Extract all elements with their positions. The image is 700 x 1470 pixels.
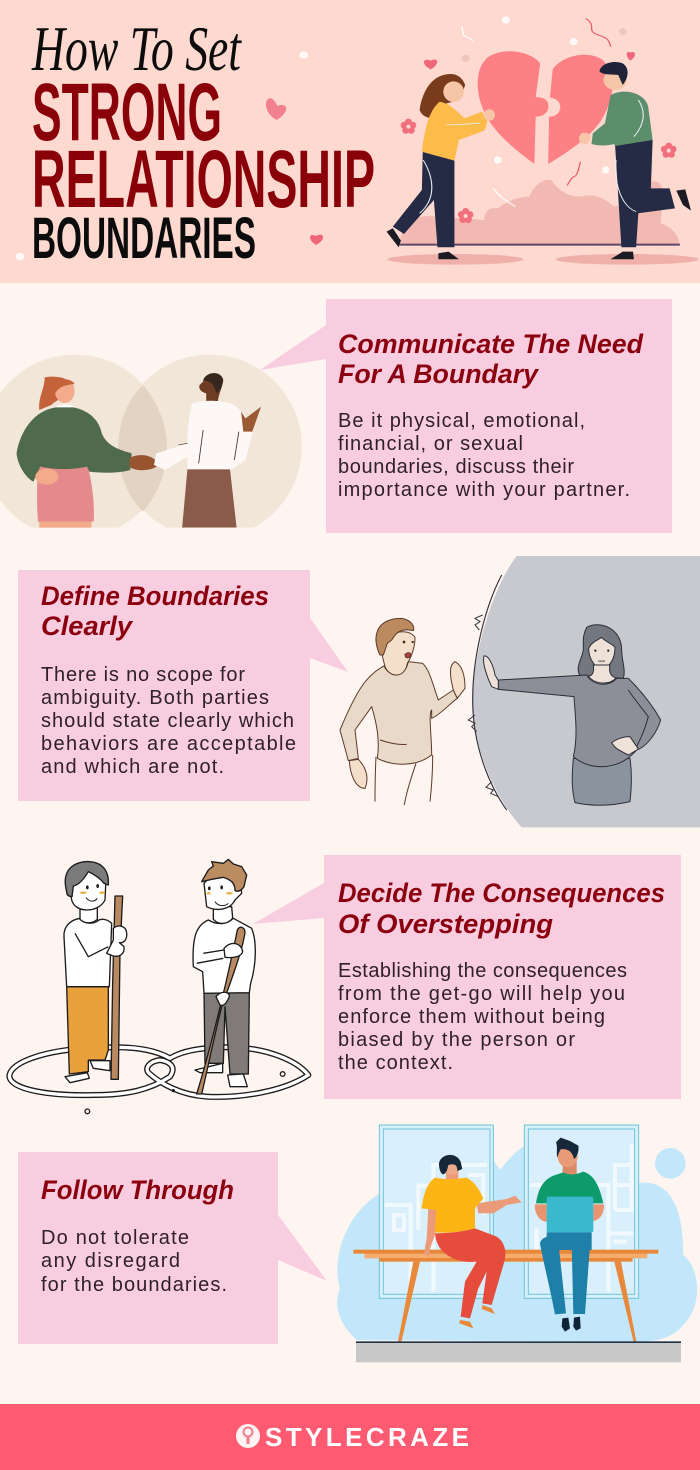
illustration: two people drawing circles with sticks bbox=[9, 859, 308, 1114]
title: How To Set bbox=[31, 13, 243, 84]
body text: behaviors are acceptable bbox=[41, 733, 296, 755]
body text: financial, or sexual bbox=[338, 433, 523, 455]
speech bubble bbox=[18, 570, 348, 801]
heading bbox=[41, 581, 269, 641]
illustration: woman holding up a hand at a wall bbox=[340, 556, 700, 827]
woman bbox=[422, 1155, 522, 1328]
body text: the context. bbox=[338, 1052, 453, 1074]
body text: Do not tolerate bbox=[41, 1227, 189, 1249]
heading bbox=[338, 329, 644, 389]
heading: For A Boundary bbox=[338, 359, 540, 389]
heading bbox=[338, 878, 665, 939]
right person bbox=[193, 859, 255, 1094]
body text: should state clearly which bbox=[41, 710, 294, 732]
body text bbox=[41, 1227, 227, 1296]
title: STRONG bbox=[32, 67, 222, 158]
body text bbox=[41, 664, 296, 778]
header banner bbox=[0, 0, 700, 283]
body text bbox=[338, 960, 627, 1074]
body text: enforce them without being bbox=[338, 1006, 605, 1028]
left person bbox=[64, 862, 127, 1083]
heading: Of Overstepping bbox=[338, 909, 554, 939]
body text: and which are not. bbox=[41, 756, 224, 778]
title: BOUNDARIES bbox=[32, 206, 256, 271]
logo mark bbox=[236, 1424, 260, 1448]
logo wordmark: STYLECRAZE bbox=[265, 1422, 469, 1452]
title: RELATIONSHIP bbox=[32, 134, 375, 225]
speech bubble bbox=[18, 1152, 327, 1344]
heading: Define Boundaries bbox=[41, 581, 269, 611]
body text: Establishing the consequences bbox=[338, 960, 627, 982]
woman bbox=[484, 625, 661, 805]
illustration: couple sitting on a bench bbox=[337, 1125, 697, 1362]
body text: for the boundaries. bbox=[41, 1274, 227, 1296]
panel: decide the consequences of overstepping bbox=[253, 855, 681, 1099]
flowers bbox=[401, 119, 677, 223]
heading: Decide The Consequences bbox=[338, 878, 665, 908]
floor bbox=[356, 1342, 681, 1362]
body text: Be it physical, emotional, bbox=[338, 410, 585, 432]
body text: There is no scope for bbox=[41, 664, 245, 686]
footer bbox=[0, 1404, 700, 1470]
title bbox=[31, 13, 375, 271]
bench bbox=[353, 1250, 658, 1343]
panel: communicate the need for a boundary bbox=[260, 299, 672, 533]
speech bubble bbox=[260, 299, 672, 533]
speech bubble bbox=[253, 855, 681, 1099]
heading: Communicate The Need bbox=[338, 329, 644, 359]
panel: define boundaries clearly bbox=[18, 570, 348, 801]
windows bbox=[379, 1125, 639, 1298]
panel: follow through bbox=[18, 1152, 327, 1344]
body text: biased by the person or bbox=[338, 1029, 575, 1051]
heading: Clearly bbox=[41, 611, 134, 641]
body text: any disregard bbox=[41, 1250, 180, 1272]
rope figure eight bbox=[9, 1047, 308, 1097]
illustration: two people shaking hands bbox=[0, 355, 302, 539]
man bbox=[340, 618, 465, 805]
body text: from the get-go will help you bbox=[338, 983, 625, 1005]
heading: Follow Through bbox=[41, 1175, 234, 1205]
body text: importance with your partner. bbox=[338, 479, 630, 501]
man bbox=[535, 1138, 604, 1332]
body text bbox=[338, 410, 630, 501]
body text: boundaries, discuss their bbox=[338, 456, 574, 478]
illustration: couple joining heart bbox=[16, 16, 699, 265]
body text: ambiguity. Both parties bbox=[41, 687, 269, 709]
